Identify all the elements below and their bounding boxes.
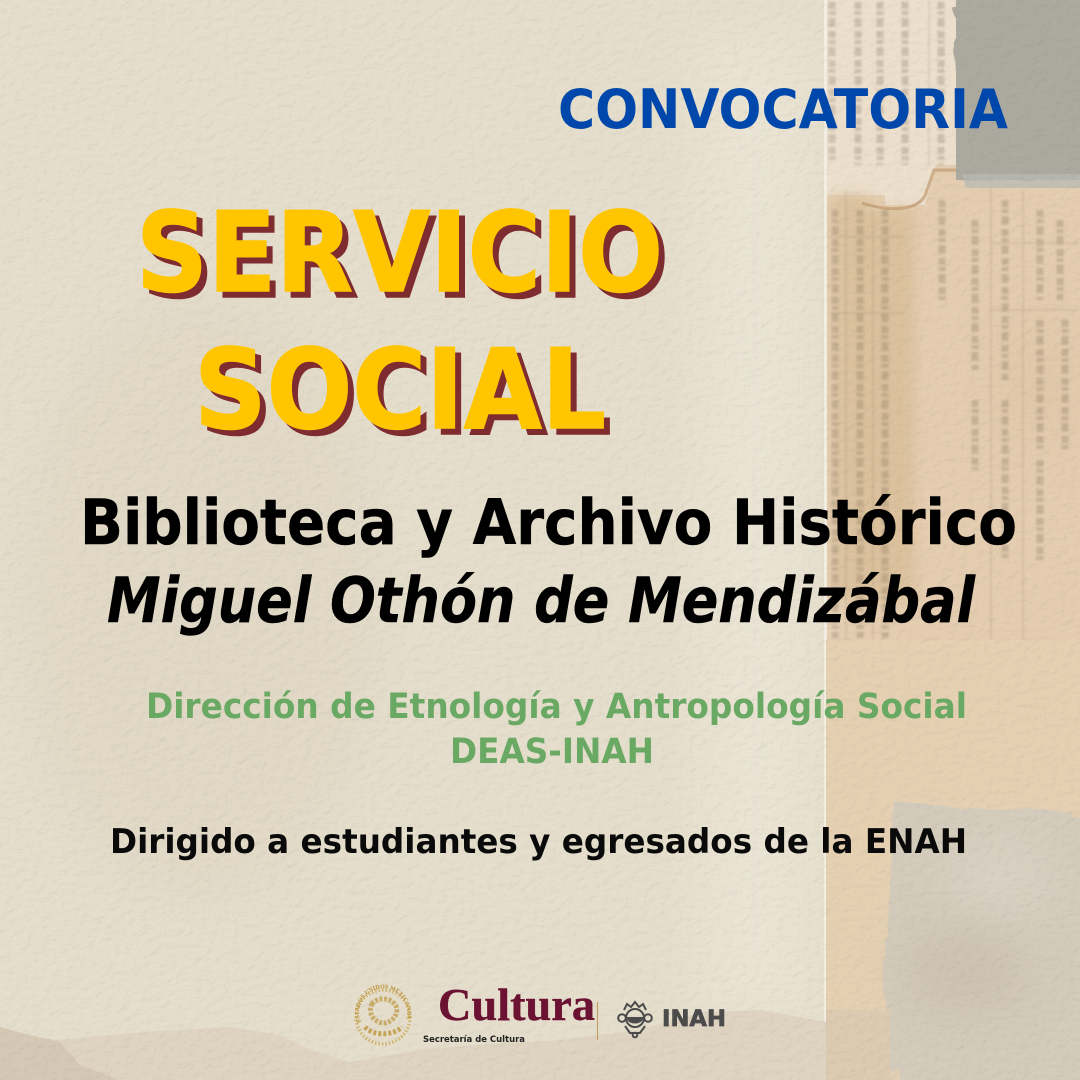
logo: national seal bbox=[354, 984, 412, 1046]
logos footer bbox=[354, 980, 726, 1046]
title shadow bbox=[142, 195, 669, 461]
title shadow: SERVICIO bbox=[142, 195, 669, 324]
subtitle: library and archive: Biblioteca y Archivo Histórico bbox=[80, 486, 1017, 559]
department name: Dirección de Etnología y Antropología Social bbox=[146, 687, 967, 727]
logo: cultura bbox=[423, 980, 595, 1045]
gray torn paper edge, bottom right bbox=[883, 801, 1072, 1072]
pale base of gray paper bbox=[962, 174, 1080, 188]
divider bbox=[597, 1002, 598, 1040]
logo: national seal: ESTADOS UNIDOS MEXICANOS bbox=[354, 984, 411, 1024]
logo: cultura: Cultura bbox=[438, 980, 595, 1030]
torn darker paper along the bottom bbox=[0, 1010, 826, 1080]
gray torn paper edge, top right bbox=[953, 8, 1072, 180]
title shadow: SOCIAL bbox=[200, 332, 612, 461]
audience line: Dirigido a estudiantes y egresados de la ENAH bbox=[110, 822, 967, 862]
stained newsprint area bbox=[826, 168, 1080, 640]
logo: cultura: Secretaría de Cultura bbox=[423, 1035, 525, 1045]
title: servicio social bbox=[136, 189, 669, 461]
stain edge line bbox=[862, 170, 958, 209]
newsprint rules and print columns bbox=[828, 0, 1078, 640]
title face: SERVICIO bbox=[136, 189, 663, 318]
department name: DEAS-INAH bbox=[450, 732, 654, 772]
heading: convocatoria: CONVOCATORIA bbox=[558, 78, 1008, 141]
title face bbox=[136, 189, 663, 455]
white edge of left paper bbox=[824, 0, 827, 1030]
gray paper fill, top right bbox=[956, 0, 1080, 180]
logo: inah bbox=[618, 1002, 726, 1037]
gray paper fill, bottom right bbox=[900, 818, 1080, 1080]
logo: inah: INAH bbox=[662, 1007, 726, 1032]
title face: SOCIAL bbox=[194, 326, 606, 455]
subtitle: library and archive: Miguel Othón de Mendizábal bbox=[107, 564, 976, 637]
soft darker tone on the left paper bbox=[20, 300, 380, 900]
department name bbox=[146, 687, 967, 772]
light newsprint column at the top bbox=[826, 0, 958, 205]
tan wash, lower right bbox=[826, 640, 1080, 1080]
tan strip on the right bbox=[826, 0, 1080, 1080]
lighter strip beside the tan bbox=[700, 40, 810, 1020]
subtitle: library and archive bbox=[80, 486, 1017, 637]
